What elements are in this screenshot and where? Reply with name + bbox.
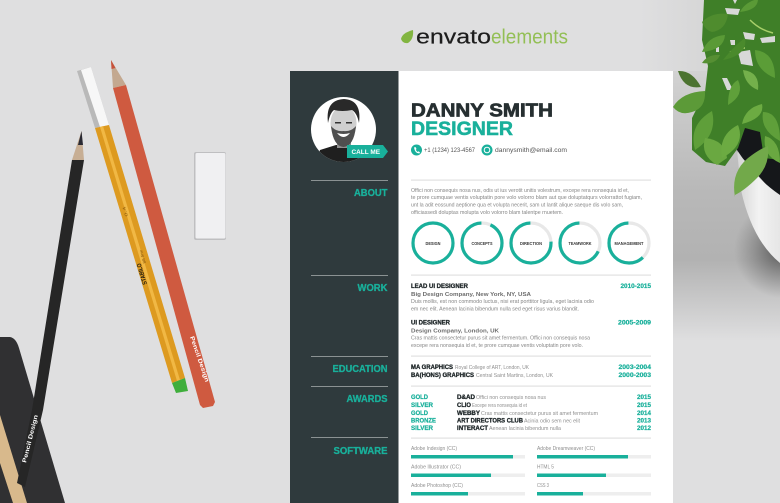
awards list: 2012 [637,426,652,432]
work entry: lead ui designer [411,284,652,312]
skill ring: direction [511,223,551,263]
work entry: ui designer: 2005-2009 [618,320,652,326]
about paragraph: unt la adit eossund aeptione qua et volupta necerit, sam ut lantit alique saeque dis volo sam, [411,202,623,208]
education entries [411,365,652,379]
awards list: GOLD [411,411,429,417]
software bar: css3: CSS 3 [537,483,549,489]
contact: email: dannysmith@email.com [495,148,567,154]
skill ring: direction: DIRECTION [520,241,542,246]
education entries: Central Saint Martins, London, UK [476,373,553,379]
work entry: ui designer [411,320,652,349]
skill ring: concepts [462,223,502,263]
logo: envato elements: elements [491,26,568,48]
awards list: SILVER [411,426,434,432]
call me tag: CALL ME [352,149,381,156]
awards list: CLIO [457,403,471,409]
awards list: BRONZE [411,418,436,424]
orange pencil: STABILO [137,262,149,285]
sidebar label: about: ABOUT [354,188,388,199]
awards list: Cras mattis consectetur purus sit amet fermentum [481,411,598,417]
work entry: lead ui designer: LEAD UI DESIGNER [411,284,469,290]
awards list: SILVER [411,403,434,409]
awards list: Acinia odio sem nec elit [524,418,580,424]
portrait photo [311,97,376,165]
orange pencil: 88 fine [138,248,147,264]
eraser [194,152,226,240]
awards list: 2014 [637,411,652,417]
contact: phone [411,144,476,156]
software bar: photoshop: Adobe Photoshop (CC) [411,483,463,489]
awards list [411,395,652,432]
awards list: Aenean lacinia bibendum nulla [489,426,561,432]
awards list: WEBBY [457,411,480,417]
black pencil: Pencil Design [22,414,40,463]
black pencil [17,131,84,487]
about paragraph: te prore cumquae ventis voluptatin pore volo volorro blam aut que doluptatqurs volorrattot fugiam, [411,195,642,201]
education entries: Royal College of ART, London, UK [455,365,529,371]
plant pot [735,118,780,263]
sidebar label: work: WORK [358,283,388,294]
work entry: ui designer: excepe rera nonsequia id et, te prore cumquae ventis voluptatin pore volo. [411,343,583,349]
education entries: 2003-2004 [618,365,652,371]
software bar: html5: HTML 5 [537,464,554,470]
work entry: ui designer: Cras mattis consectetur purus sit amet fermentum. Offici non consequis nosa [411,336,591,342]
software bar: dreamweaver [537,446,651,458]
call me tag [347,145,388,158]
work entry: lead ui designer: em nec elit. Aenean lacinia bibendum nulla sed eget risus varius blandit. [411,306,579,312]
awards list: D&AD [457,395,476,401]
about paragraph [411,188,642,216]
red pencil [111,60,215,408]
software bar: css3 [537,483,651,496]
sidebar label: education: EDUCATION [332,364,388,375]
contact: phone: +1 (1234) 123-4567 [424,148,476,154]
logo: envato elements: envato [416,26,491,48]
education entries: MA GRAPHICS [411,365,453,371]
red pencil: Pencil Design [188,336,210,383]
awards list: Excepe rera nonsequia id et [472,403,527,409]
awards list: INTERACT [457,426,488,432]
sidebar label: software: SOFTWARE [334,446,388,457]
education entries: 2000-2003 [618,373,652,379]
awards list: Offici non consequis nosa nus [476,395,546,401]
software bar: illustrator: Adobe Illustrator (CC) [411,464,461,470]
skill ring: design: DESIGN [426,241,440,246]
orange pencil: 0.4 [121,205,129,217]
software bar: photoshop [411,483,525,496]
software bar: indesign: Adobe Indesign (CC) [411,446,457,452]
notebook [0,337,65,503]
skill ring: teamwork: TEAMWORK [568,241,592,246]
education entries: BA(HONS) GRAPHICS [411,373,474,379]
paper shadow [673,71,780,341]
awards list: 2013 [637,418,652,424]
plant leaves [673,0,780,197]
awards list: 2015 [637,403,652,409]
about paragraph: Offici non consequis nosa nus, odis ut ius verotit unitis volestrum, excepe rera nonsequia id et, [411,188,629,194]
awards list: ART DIRECTORS CLUB [457,418,524,424]
software bar: indesign [411,446,525,458]
software bar: html5 [537,464,651,477]
sidebar label: awards: AWARDS [346,394,388,405]
work entry: lead ui designer: Big Design Company, New York, NY, USA [411,292,532,298]
skill ring: management: MANAGEMENT [614,241,644,246]
skill ring: teamwork [560,223,600,263]
skill ring: management [609,223,649,263]
resume paper [290,71,673,503]
logo: envato elements [401,26,568,48]
about paragraph: officiassedi doluptas molupta volo volorro blam talentpe rnuetem. [411,210,563,216]
software bar: dreamweaver: Adobe Dreamweaver (CC) [537,446,595,452]
skill ring: concepts: CONCEPTS [472,241,493,246]
work entry: lead ui designer: 2010-2015 [620,284,652,290]
orange pencil [77,67,188,393]
awards list: 2015 [637,395,652,401]
work entry: ui designer: Design Company, London, UK [411,328,500,334]
awards list: GOLD [411,395,429,401]
software bar: illustrator [411,464,525,477]
contact: email [482,144,567,156]
panel: dark sidebar [290,71,398,503]
job title: DESIGNER [411,119,513,140]
name heading: DANNY SMITH [411,100,553,120]
work entry: lead ui designer: Duis mollis, est non commodo luctus, nisi erat porttitor ligula, eget lacinia odio [411,299,594,305]
work entry: ui designer: UI DESIGNER [411,320,451,326]
skill ring: design [413,223,453,263]
